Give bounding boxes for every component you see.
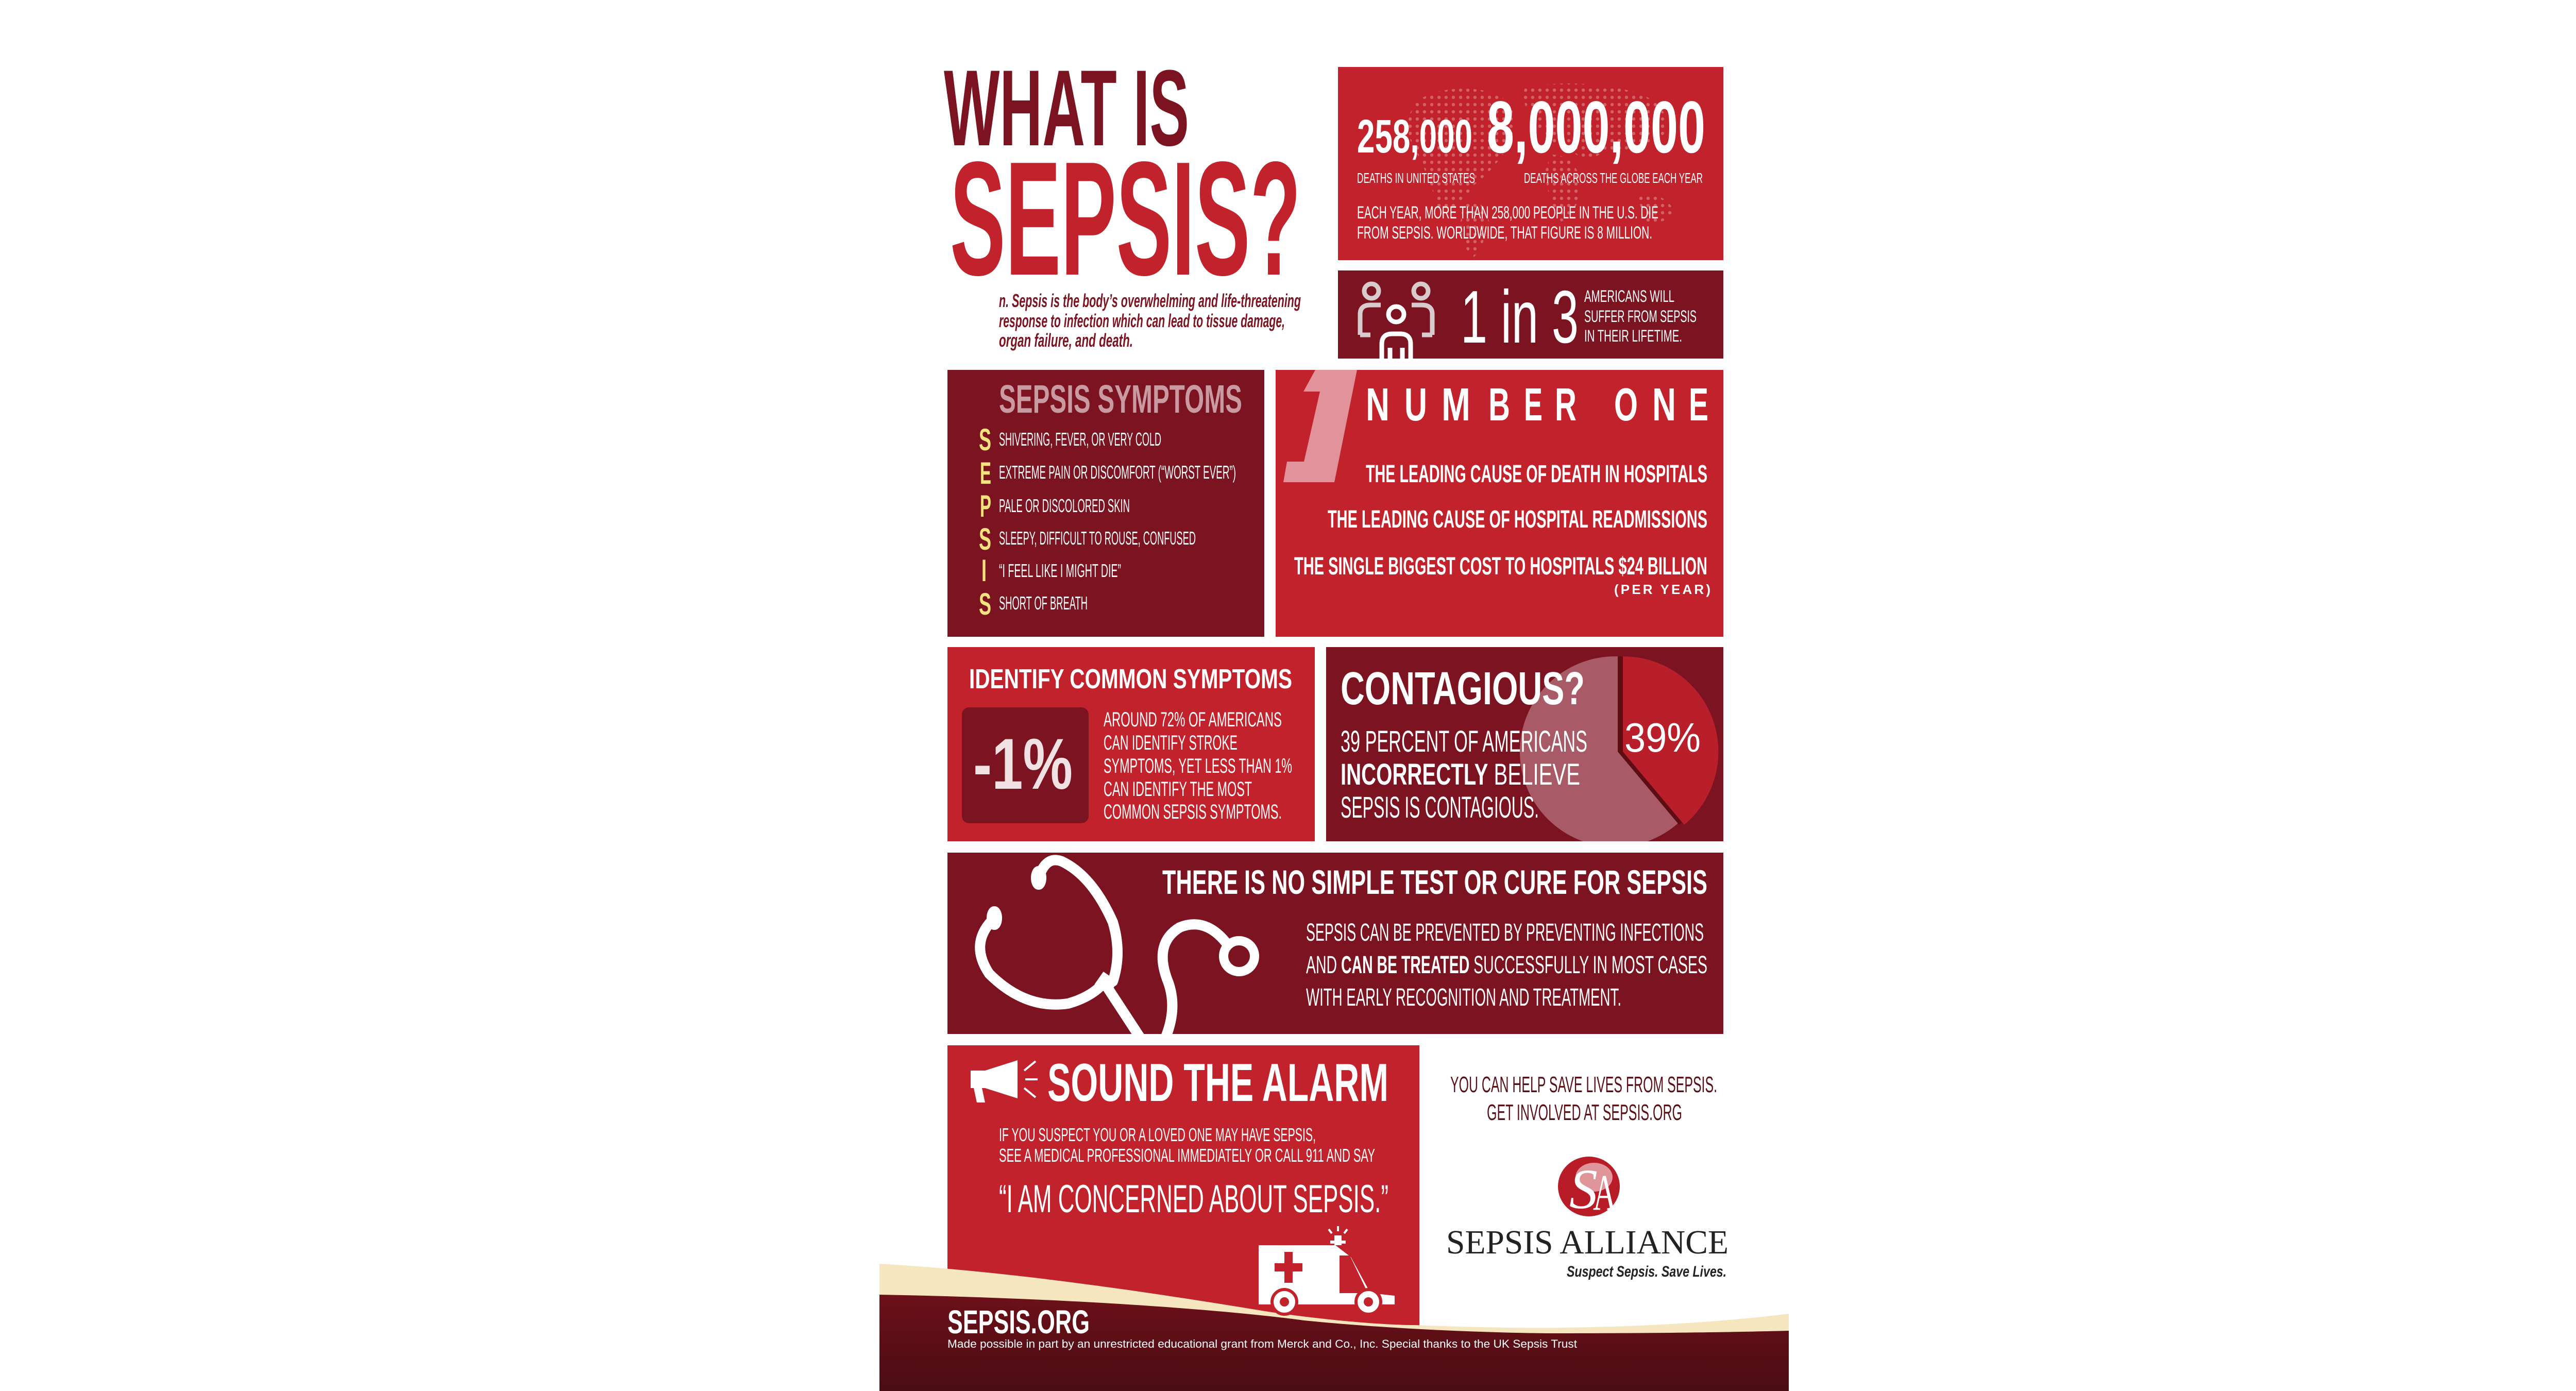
panel: no simple test [947,853,1723,1051]
panel: sepsis symptoms: I [981,553,987,588]
logo: sepsis alliance: SEPSIS ALLIANCE [1446,1224,1728,1261]
title: SEPSIS? [950,128,1301,309]
icon: stethoscope [980,860,1255,1051]
panel: no simple test: SEPSIS CAN BE PREVENTED BY PREVENTING INFECTIONS [1306,919,1704,946]
panel: no simple test: THERE IS NO SIMPLE TEST OR CURE FOR SEPSIS [1162,863,1707,901]
panel: death statistics: DEATHS ACROSS THE GLOBE EACH YEAR [1524,170,1703,186]
panel: sound the alarm: IF YOU SUSPECT YOU OR A LOVED ONE MAY HAVE SEPSIS, [999,1124,1316,1145]
big number 1 [1283,370,1357,482]
panel: contagious: CONTAGIOUS? [1341,663,1585,715]
panel: no simple test: AND CAN BE TREATED SUCCESSFULLY IN MOST CASES [1306,952,1707,979]
panel: identify common symptoms: CAN IDENTIFY STROKE [1104,732,1238,754]
definition text: n. Sepsis is the body’s overwhelming and life-threatening [999,290,1301,311]
call to action: GET INVOLVED AT SEPSIS.ORG [1487,1100,1682,1125]
panel: identify common symptoms: CAN IDENTIFY THE MOST [1104,778,1252,801]
panel: death statistics [1338,67,1723,260]
panel: identify common symptoms [947,647,1315,841]
heading: number one: O [1614,379,1638,431]
definition text [999,290,1301,351]
panel: sepsis symptoms: S [979,422,991,457]
panel: sepsis symptoms [947,370,1264,637]
footer text: SEPSIS.ORG [947,1303,1090,1341]
panel: death statistics: EACH YEAR, MORE THAN 258,000 PEOPLE IN THE U.S. DIE [1357,203,1658,223]
heading: number one: E [1524,379,1543,431]
definition text: organ failure, and death. [999,330,1133,351]
panel: number one: THE LEADING CAUSE OF DEATH IN HOSPITALS [1366,461,1707,488]
panel: 1 in 3 [1338,270,1723,359]
definition text: response to infection which can lead to tissue damage, [999,310,1285,331]
panel: number one: THE LEADING CAUSE OF HOSPITAL READMISSIONS [1328,506,1707,533]
pie chart 39% [1520,656,1718,847]
panel: death statistics: FROM SEPSIS. WORLDWIDE, THAT FIGURE IS 8 MILLION. [1357,223,1652,243]
panel: number one: THE SINGLE BIGGEST COST TO HOSPITALS $24 BILLION [1294,553,1707,580]
heading: number one: E [1689,379,1708,431]
panel: contagious: 39 PERCENT OF AMERICANS [1341,725,1587,758]
panel: 1 in 3: IN THEIR LIFETIME. [1584,327,1682,345]
panel: sound the alarm: “I AM CONCERNED ABOUT SEPSIS.” [999,1177,1388,1221]
panel: sepsis symptoms: SEPSIS SYMPTOMS [999,377,1242,421]
icon: people [1360,284,1432,359]
panel: identify common symptoms: COMMON SEPSIS SYMPTOMS. [1104,801,1282,823]
title: WHAT IS [944,47,1189,168]
panel: death statistics: DEATHS IN UNITED STATES [1357,170,1475,186]
title [944,47,1301,309]
panel: sepsis symptoms: S [979,587,991,621]
logo: sepsis alliance: A [1593,1164,1616,1221]
logo: sepsis alliance [1446,1157,1728,1280]
panel: 1 in 3: 1 in 3 [1461,275,1579,359]
panel: sepsis symptoms: P [980,489,991,523]
stat box: -1% [973,723,1073,804]
heading: number one: M [1442,379,1470,431]
panel: contagious [1326,647,1723,847]
icon: ambulance [1259,1226,1395,1314]
panel: sound the alarm [947,1045,1419,1334]
panel: sepsis symptoms: EXTREME PAIN OR DISCOMFORT (“WORST EVER”) [999,462,1236,483]
heading: number one: N [1652,379,1676,431]
footer text [947,1303,1577,1350]
heading: number one: B [1488,379,1510,431]
footer text: Made possible in part by an unrestricted educational grant from Merck and Co., Inc. Special thanks to the UK Sepsis Trust [947,1337,1577,1350]
call to action [1450,1072,1717,1125]
panel: contagious: 39% [1624,715,1701,760]
panel: death statistics: 258,000 [1357,110,1472,163]
heading: number one: U [1404,379,1427,431]
panel: number one: (PER YEAR) [1614,582,1710,597]
icon: megaphone [971,1060,1038,1102]
panel: sound the alarm: SOUND THE ALARM [1047,1053,1388,1113]
call to action: YOU CAN HELP SAVE LIVES FROM SEPSIS. [1450,1072,1717,1097]
panel: sepsis symptoms: SHIVERING, FEVER, OR VERY COLD [999,429,1161,450]
panel: contagious: INCORRECTLY BELIEVE [1341,758,1580,791]
panel: sepsis symptoms: S [979,522,991,556]
stat box [962,707,1089,823]
panel: 1 in 3: AMERICANS WILL [1584,287,1674,306]
logo: sepsis alliance: Suspect Sepsis. Save Lives. [1567,1263,1726,1280]
logo: sepsis alliance: S [1569,1158,1598,1220]
panel: sound the alarm: SEE A MEDICAL PROFESSIONAL IMMEDIATELY OR CALL 911 AND SAY [999,1145,1375,1166]
panel: contagious: SEPSIS IS CONTAGIOUS. [1341,791,1539,824]
world map dots [1408,83,1674,258]
footer wave [879,1264,1789,1391]
panel: sepsis symptoms: SHORT OF BREATH [999,592,1088,614]
panel: sepsis symptoms: E [980,456,991,490]
panel: identify common symptoms: SYMPTOMS, YET LESS THAN 1% [1104,755,1292,777]
panel: 1 in 3: SUFFER FROM SEPSIS [1584,307,1697,326]
panel: identify common symptoms: AROUND 72% OF AMERICANS [1104,708,1282,731]
panel: death statistics: 8,000,000 [1487,87,1705,168]
heading: number one: R [1555,379,1577,431]
heading: number one [1366,379,1708,431]
panel: number one [1276,370,1723,637]
panel: sepsis symptoms: SLEEPY, DIFFICULT TO ROUSE, CONFUSED [999,528,1196,549]
panel: sepsis symptoms: PALE OR DISCOLORED SKIN [999,495,1130,516]
panel: identify common symptoms: IDENTIFY COMMON SYMPTOMS [969,664,1292,694]
panel: sepsis symptoms: “I FEEL LIKE I MIGHT DIE” [999,560,1121,581]
heading: number one: N [1366,379,1389,431]
panel: no simple test: WITH EARLY RECOGNITION AND TREATMENT. [1306,984,1621,1011]
